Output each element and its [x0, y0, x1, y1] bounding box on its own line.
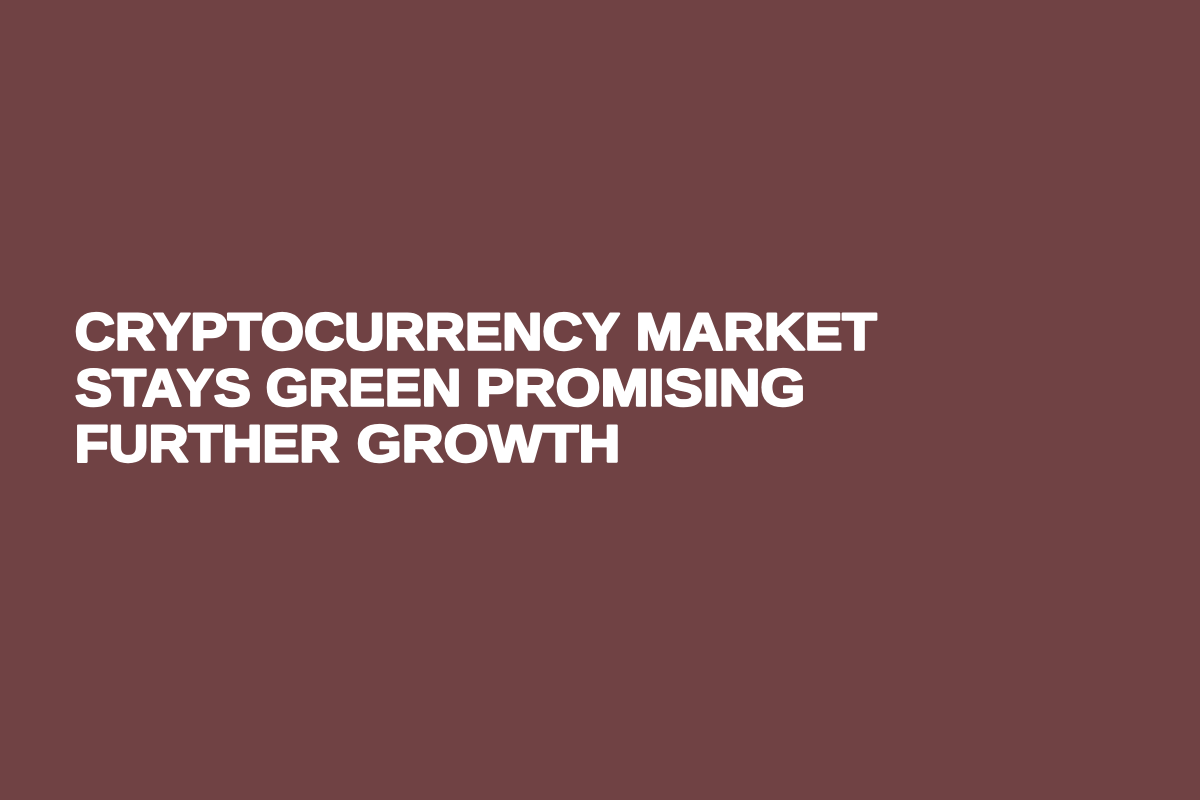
title: MARKET: [636, 304, 877, 362]
title: PROMISING: [476, 360, 805, 418]
title: GROWTH: [357, 416, 620, 474]
title: STAYS: [75, 360, 251, 418]
title: FURTHER: [75, 416, 339, 474]
title: CRYPTOCURRENCY: [75, 304, 620, 362]
title: GREEN: [266, 360, 461, 418]
